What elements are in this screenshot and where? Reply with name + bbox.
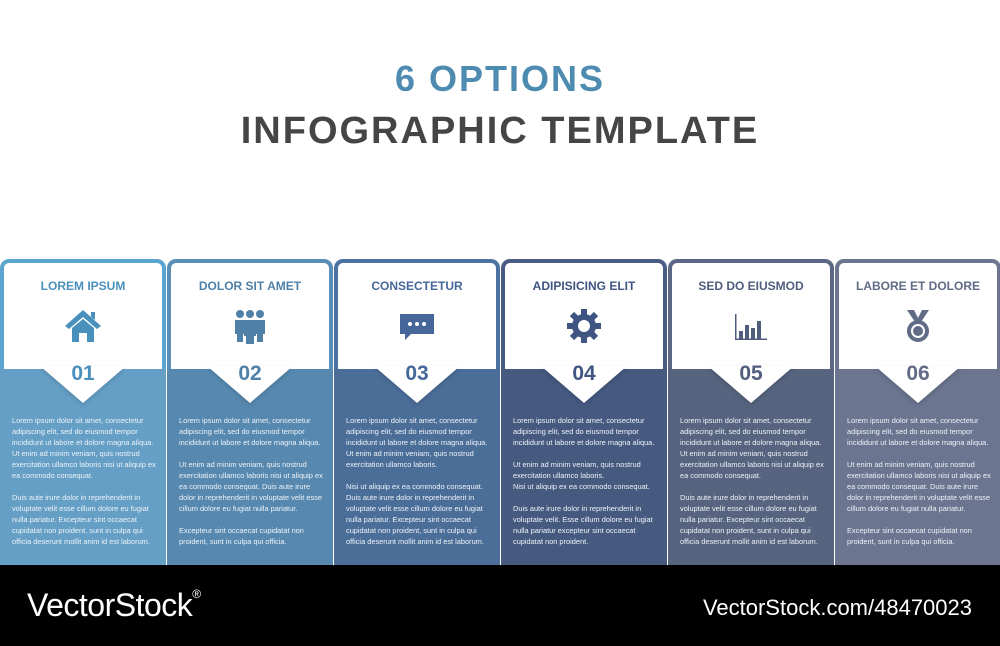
icon: medal	[907, 310, 929, 342]
panel: option 02	[167, 259, 333, 565]
text 06	[847, 416, 991, 546]
text 04: Ut enim ad minim veniam, quis nostrud exercitation ullamco laboris.	[513, 460, 641, 480]
text 02	[179, 416, 323, 546]
subtitle: INFOGRAPHIC TEMPLATE	[241, 110, 759, 152]
text 06: Excepteur sint occaecat cupidatat non proident, sunt in culpa qui officia.	[847, 526, 972, 546]
heading 03: CONSECTETUR	[371, 279, 463, 293]
text 06: Lorem ipsum dolor sit amet, consectetur adipiscing elit, sed do eiusmod tempor incididunt ut labore et dolore magna aliqua.	[847, 416, 988, 447]
text 01	[12, 416, 156, 546]
text 04	[513, 416, 654, 546]
panel: option 05	[668, 259, 834, 565]
number 03: 03	[405, 362, 429, 385]
panel: option 01	[0, 259, 166, 565]
text 03: Lorem ipsum dolor sit amet, consectetur adipiscing elit, sed do eiusmod tempor incididunt ut labore et dolore magna aliqua. Ut enim ad minim veniam, quis nostrud exercitation ullamco laboris.	[346, 416, 487, 469]
icon: gear	[567, 309, 601, 343]
icon: chat	[400, 314, 434, 340]
number 04: 04	[572, 362, 596, 385]
footer bar	[0, 565, 1000, 646]
text 04: Nisi ut aliquip ex ea commodo consequat.	[513, 482, 650, 491]
number 02: 02	[238, 362, 262, 385]
panel: option 04	[501, 259, 667, 565]
text 03: Nisi ut aliquip ex ea commodo consequat. Duis aute irure dolor in reprehenderit in voluptate velit esse cillum dolore eu fugiat nulla pariatur. Excepteur sint occaecat cupidatat non proident, sunt in culpa qui officia deserunt mollit anim id est laborum.	[346, 482, 484, 546]
heading 06: LABORE ET DOLORE	[856, 279, 980, 293]
text 04: Duis aute irure dolor in reprehenderit in voluptate velit. Esse cillum dolore eu fugiat nulla pariatur excepteur sint occaecat cupidatat non proident.	[513, 504, 653, 546]
heading 05: SED DO EIUSMOD	[698, 279, 804, 293]
panel: option 03	[334, 259, 500, 565]
heading 02: DOLOR SIT AMET	[199, 279, 301, 293]
text 05: Duis aute irure dolor in reprehenderit in voluptate velit esse cillum dolore eu fugiat nulla pariatur. Excepteur sint occaecat cupidatat non proident, sunt in culpa qui officia deserunt mollit anim id est laborum.	[680, 493, 818, 546]
number 06: 06	[906, 362, 930, 385]
footer brand: VectorStock®	[27, 587, 201, 623]
number 05: 05	[739, 362, 763, 385]
title: 6 OPTIONS	[395, 58, 605, 99]
text 02: Excepteur sint occaecat cupidatat non proident, sunt in culpa qui officia.	[179, 526, 304, 546]
text 03	[346, 416, 487, 546]
text 05	[680, 416, 824, 546]
text 01: Duis aute irure dolor in reprehenderit in voluptate velit esse cillum dolore eu fugiat nulla pariatur. Excepteur sint occaecat cupidatat non proident, sunt in culpa qui officia deserunt mollit anim id est laborum.	[12, 493, 150, 546]
text 06: Ut enim ad minim veniam, quis nostrud exercitation ullamco laboris nisi ut aliquip ex ea commodo consequat. Duis aute irure dolor in reprehenderit in voluptate velit esse cillum dolore eu fugiat nulla pariatur.	[847, 460, 991, 513]
number 01: 01	[71, 362, 95, 385]
heading 04: ADIPISICING ELIT	[533, 279, 635, 293]
footer url: VectorStock.com/48470023	[703, 595, 972, 620]
icon: people	[235, 310, 265, 344]
text 02: Lorem ipsum dolor sit amet, consectetur adipiscing elit, sed do eiusmod tempor incididunt ut labore et dolore magna aliqua.	[179, 416, 320, 447]
text 02: Ut enim ad minim veniam, quis nostrud exercitation ullamco laboris nisi ut aliquip ex ea commodo consequat. Duis aute irure dolor in reprehenderit in voluptate velit esse cillum dolore eu fugiat nulla pariatur.	[179, 460, 323, 513]
icon: house	[65, 310, 101, 342]
text 05: Lorem ipsum dolor sit amet, consectetur adipiscing elit, sed do eiusmod tempor incididunt ut labore et dolore magna aliqua. Ut enim ad minim veniam, quis nostrud exercitation ullamco laboris nisi ut aliquip ex ea commodo consequat.	[680, 416, 824, 480]
icon: bar chart	[735, 314, 767, 340]
panel: option 06	[835, 259, 1000, 565]
text 01: Lorem ipsum dolor sit amet, consectetur adipiscing elit, sed do eiusmod tempor incididunt ut labore et dolore magna aliqua. Ut enim ad minim veniam, quis nostrud exercitation ullamco laboris nisi ut aliquip ex ea commodo consequat.	[12, 416, 156, 480]
text 04: Lorem ipsum dolor sit amet, consectetur adipiscing elit, sed do eiusmod tempor incididunt ut labore et dolore magna aliqua.	[513, 416, 654, 447]
heading 01: LOREM IPSUM	[41, 279, 125, 293]
